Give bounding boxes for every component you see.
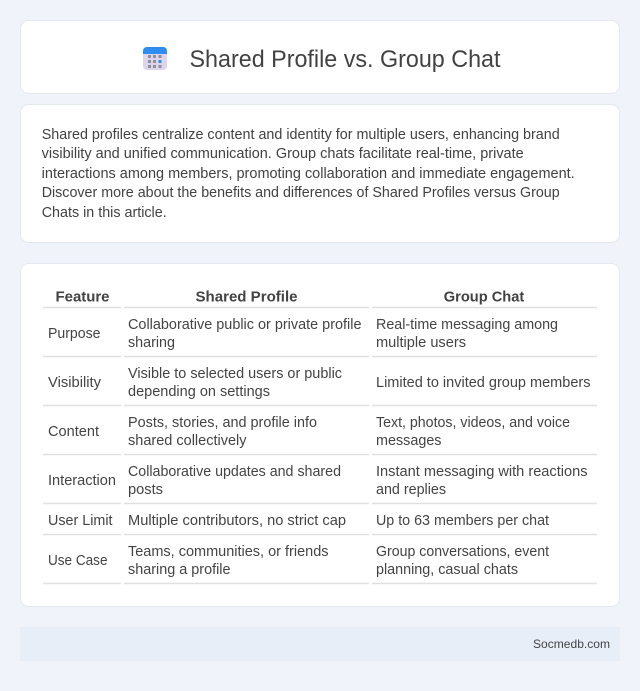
row: purpose: Real-time messaging among [376, 317, 558, 333]
footer credit: Socmedb.com [533, 637, 610, 651]
row: use case: Use Case [48, 553, 108, 569]
row: purpose: multiple users [376, 335, 466, 351]
row: interaction: Collaborative updates and shared [128, 464, 341, 480]
row: use case: sharing a profile [128, 562, 230, 578]
row: use case: Group conversations, event [376, 544, 549, 560]
row: purpose: Collaborative public or private profile [128, 317, 362, 333]
row: use case: planning, casual chats [376, 562, 518, 578]
title card [20, 20, 620, 94]
panel: introduction [20, 104, 620, 242]
row: content: messages [376, 433, 442, 449]
row: use case [48, 544, 549, 578]
intro text [42, 127, 575, 221]
row: user limit [48, 513, 549, 529]
row: interaction: and replies [376, 482, 446, 498]
row: content: Content [48, 424, 99, 440]
table header: Shared Profile [196, 290, 298, 306]
intro text: Discover more about the benefits and differences of Shared Profiles versus Group [42, 185, 560, 201]
row: user limit: User Limit [48, 513, 113, 529]
intro text: interactions among members, promoting collaboration and immediate engagement. [42, 166, 575, 182]
icon: calendar [143, 47, 167, 70]
intro text: Shared profiles centralize content and identity for multiple users, enhancing brand [42, 127, 560, 143]
table header: Feature [56, 290, 110, 306]
intro text: visibility and unified communication. Group chats facilitate real-time, private [42, 146, 524, 162]
intro text: Chats in this article. [42, 205, 167, 221]
row: interaction [48, 464, 588, 498]
row: purpose: sharing [128, 335, 175, 351]
row: content [48, 415, 570, 449]
row: user limit: Up to 63 members per chat [376, 513, 549, 529]
row: purpose [48, 317, 558, 351]
row: visibility: depending on settings [128, 384, 270, 400]
footer [20, 627, 620, 661]
row: content: shared collectively [128, 433, 247, 449]
row: user limit: Multiple contributors, no strict cap [128, 513, 346, 529]
row: interaction: posts [128, 482, 163, 498]
row: visibility: Visibility [48, 375, 102, 391]
panel: comparison table [20, 264, 620, 606]
row: content: Posts, stories, and profile info [128, 415, 317, 431]
table header [56, 290, 524, 306]
row: interaction: Instant messaging with reactions [376, 464, 588, 480]
row: visibility: Visible to selected users or public [128, 366, 342, 382]
title: Shared Profile vs. Group Chat [190, 46, 501, 73]
row: visibility [48, 366, 590, 400]
row: interaction: Interaction [48, 473, 116, 489]
table header: Group Chat [444, 290, 524, 306]
row: purpose: Purpose [48, 326, 100, 342]
row: visibility: Limited to invited group members [376, 375, 590, 391]
row: use case: Teams, communities, or friends [128, 544, 328, 560]
row: content: Text, photos, videos, and voice [376, 415, 570, 431]
